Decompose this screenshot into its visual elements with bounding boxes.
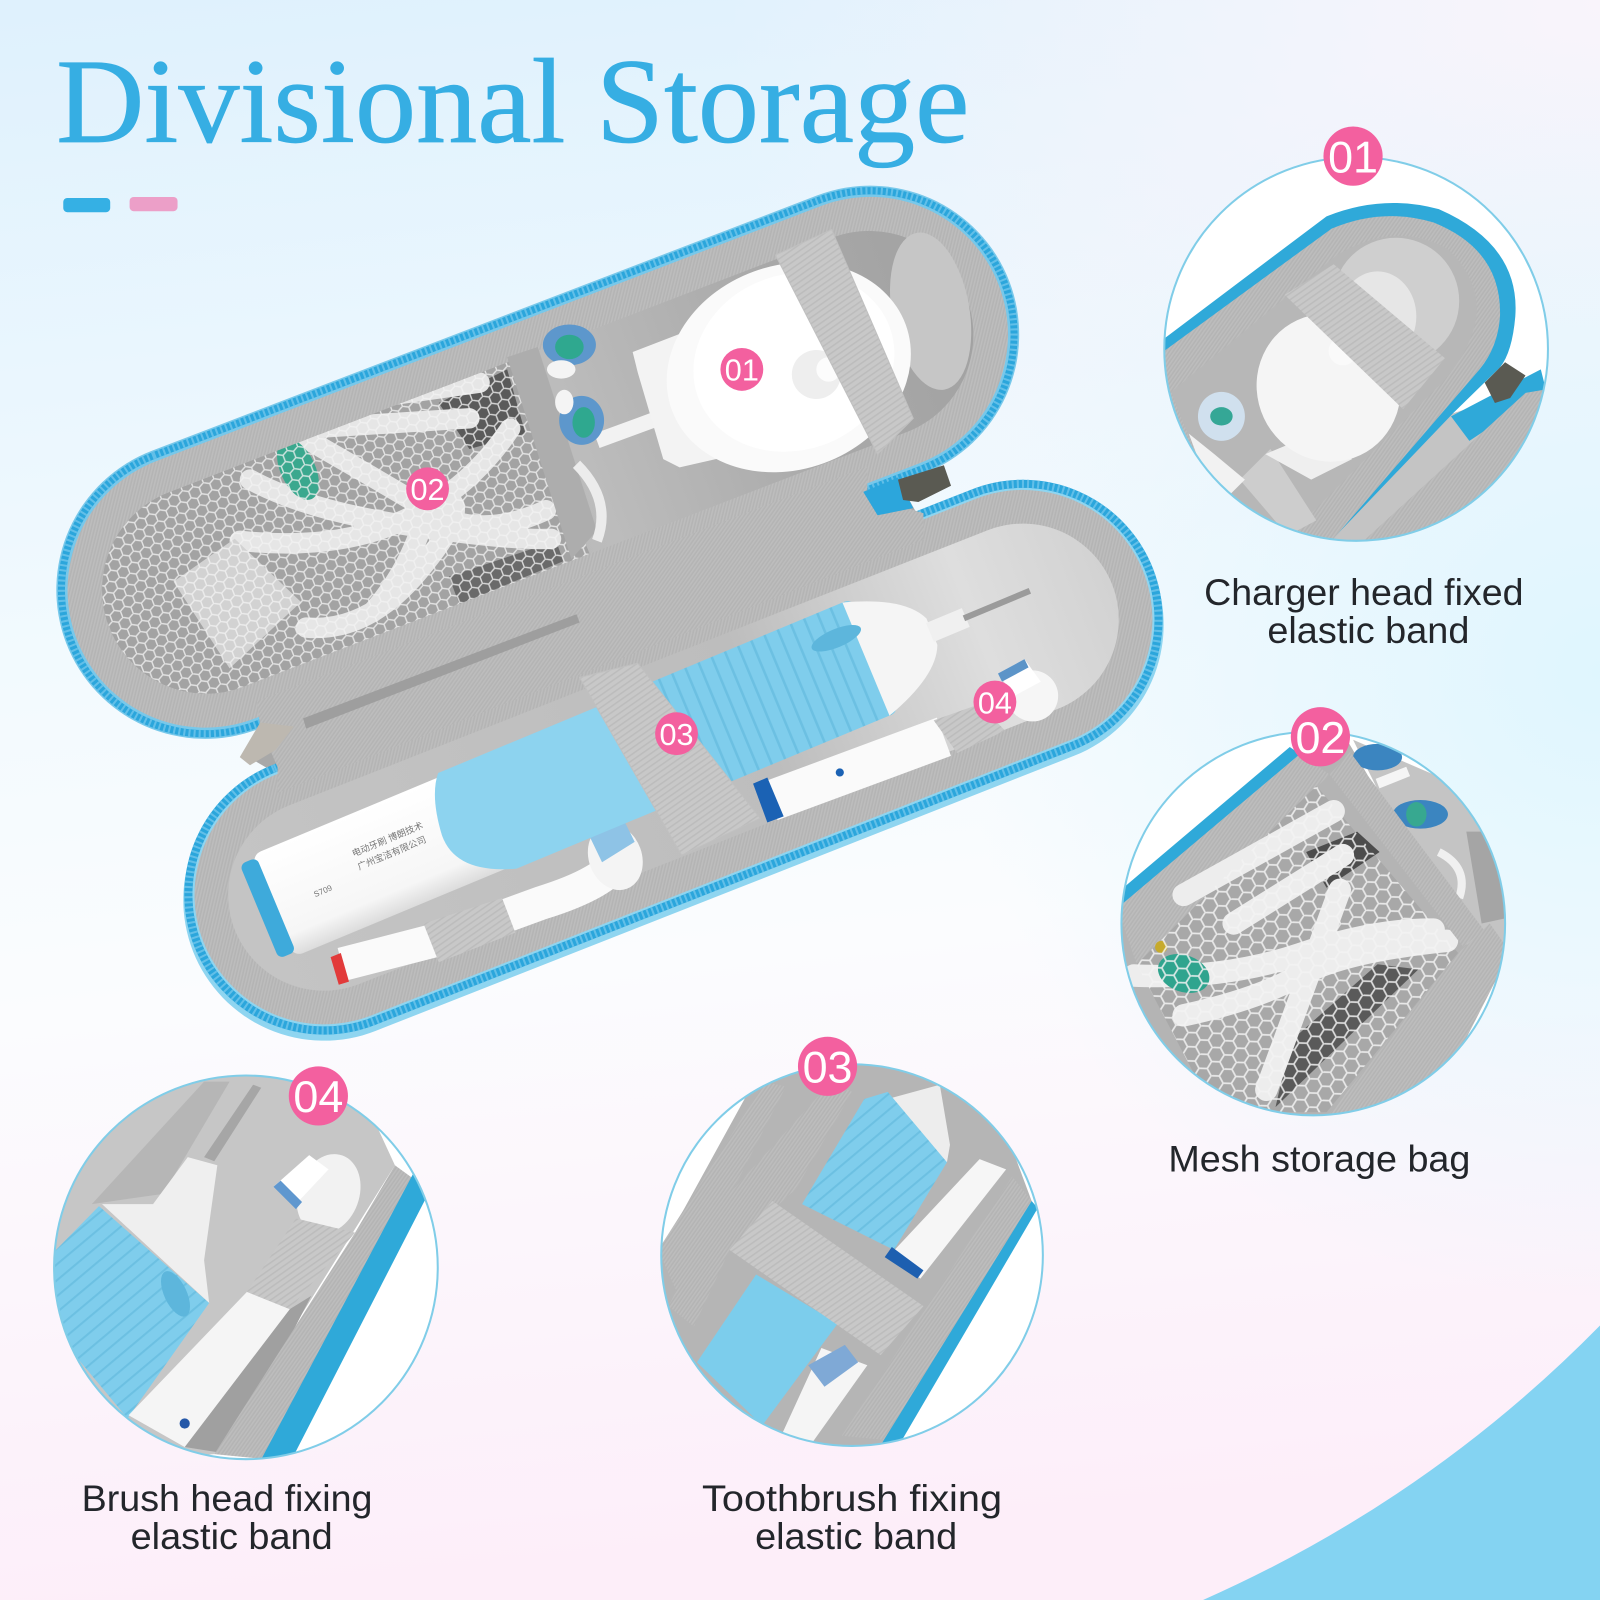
detail circle 01: charger band (1153, 157, 1556, 559)
badge 01: 01 (1328, 131, 1378, 182)
hinge backing between halves (245, 480, 923, 791)
electric toothbrush: 广州宝洁有限公司 (356, 834, 428, 872)
detail circle 02: mesh bag (1117, 732, 1531, 1122)
electric toothbrush (236, 534, 1053, 968)
mesh pocket (102, 362, 590, 694)
number badge 04 (973, 681, 1016, 723)
number badge 02 (406, 467, 449, 510)
number badge 01: 01 (725, 354, 759, 388)
number badge 03: 03 (659, 718, 694, 752)
lower half interior (200, 495, 1147, 1019)
charger (633, 229, 941, 506)
caption 04: elastic band (131, 1516, 333, 1557)
mesh pocket divider strip (507, 347, 597, 559)
lower-left brush head with handle (331, 816, 652, 985)
number badge 03 (655, 712, 698, 755)
caption 04: Brush head fixing (82, 1478, 372, 1519)
detail circle 04: brush head band (51, 1061, 438, 1469)
upper half interior (102, 229, 974, 694)
upper half: bowl highlight (879, 226, 983, 396)
caption 03: elastic band (755, 1516, 957, 1557)
charger plug (173, 539, 301, 668)
electric toothbrush: S709 (312, 883, 334, 899)
green brush in pocket (277, 442, 319, 500)
charger cable (240, 383, 551, 628)
badge 02: 02 (1295, 712, 1345, 763)
caption 04 (82, 1478, 372, 1557)
upper-right brush with handle (753, 659, 1058, 822)
lower half shell (141, 442, 1205, 1082)
zipper pull: silver (240, 722, 294, 765)
caption 03: Toothbrush fixing (702, 1478, 1002, 1519)
caption 01: Charger head fixed (1204, 572, 1523, 613)
mesh overlay (102, 362, 590, 694)
caption 01: elastic band (1267, 610, 1469, 651)
title: Divisional Storage (56, 36, 969, 169)
number badge 02: 02 (411, 473, 445, 507)
blue corner arc (1203, 1326, 1600, 1600)
elastic band: toothbrush (580, 663, 760, 855)
number badge 04: 04 (978, 686, 1012, 720)
elastic band: charger (776, 230, 913, 454)
caption 03 (702, 1478, 1002, 1557)
fabric hinge panel (257, 466, 923, 793)
caption 01 (1204, 572, 1523, 651)
badge 04: 04 (293, 1071, 343, 1122)
upper half shell (13, 142, 1063, 782)
brush heads in upper half (543, 324, 658, 541)
zipper pull: dark (863, 465, 951, 515)
open toothbrush case (56, 186, 1164, 1041)
number badge 01 (720, 348, 763, 391)
electric toothbrush: 电动牙刷 博朗技术 (350, 819, 425, 859)
badge 03: 03 (803, 1042, 853, 1093)
caption 02: Mesh storage bag (1168, 1138, 1470, 1179)
detail circle 03: toothbrush band (653, 1061, 1043, 1454)
accent pills (63, 197, 178, 212)
